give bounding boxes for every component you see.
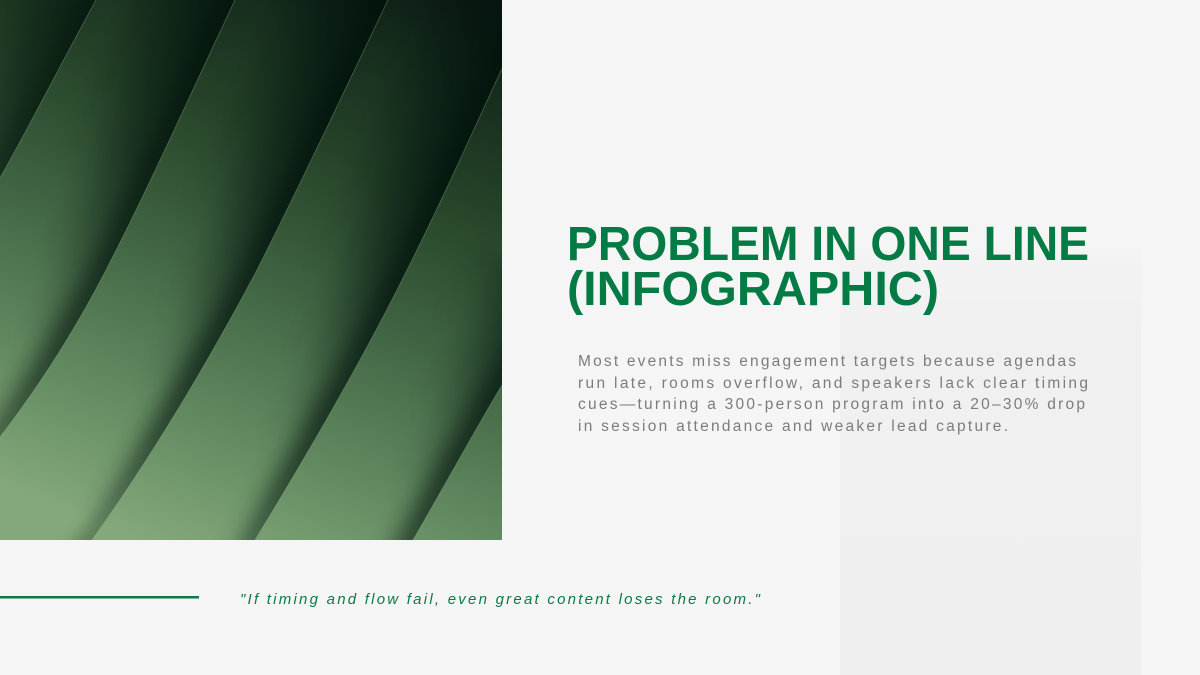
decorative background panel	[840, 250, 1141, 675]
body text: Most events miss engagement targets because agendas	[578, 353, 1076, 370]
body text: run late, rooms overflow, and speakers lack clear timing	[578, 375, 1088, 392]
title: (INFOGRAPHIC)	[567, 263, 939, 316]
image: green layered curved waves	[0, 0, 502, 540]
title	[567, 218, 1089, 316]
title: PROBLEM IN ONE LINE	[567, 218, 1089, 271]
body text: in session attendance and weaker lead capture.	[578, 418, 1008, 435]
accent line	[0, 596, 199, 598]
body text	[578, 353, 1088, 435]
quote: "If timing and flow fail, even great content loses the room."	[240, 591, 761, 608]
body text: cues—turning a 300-person program into a 20–30% drop	[578, 396, 1085, 413]
